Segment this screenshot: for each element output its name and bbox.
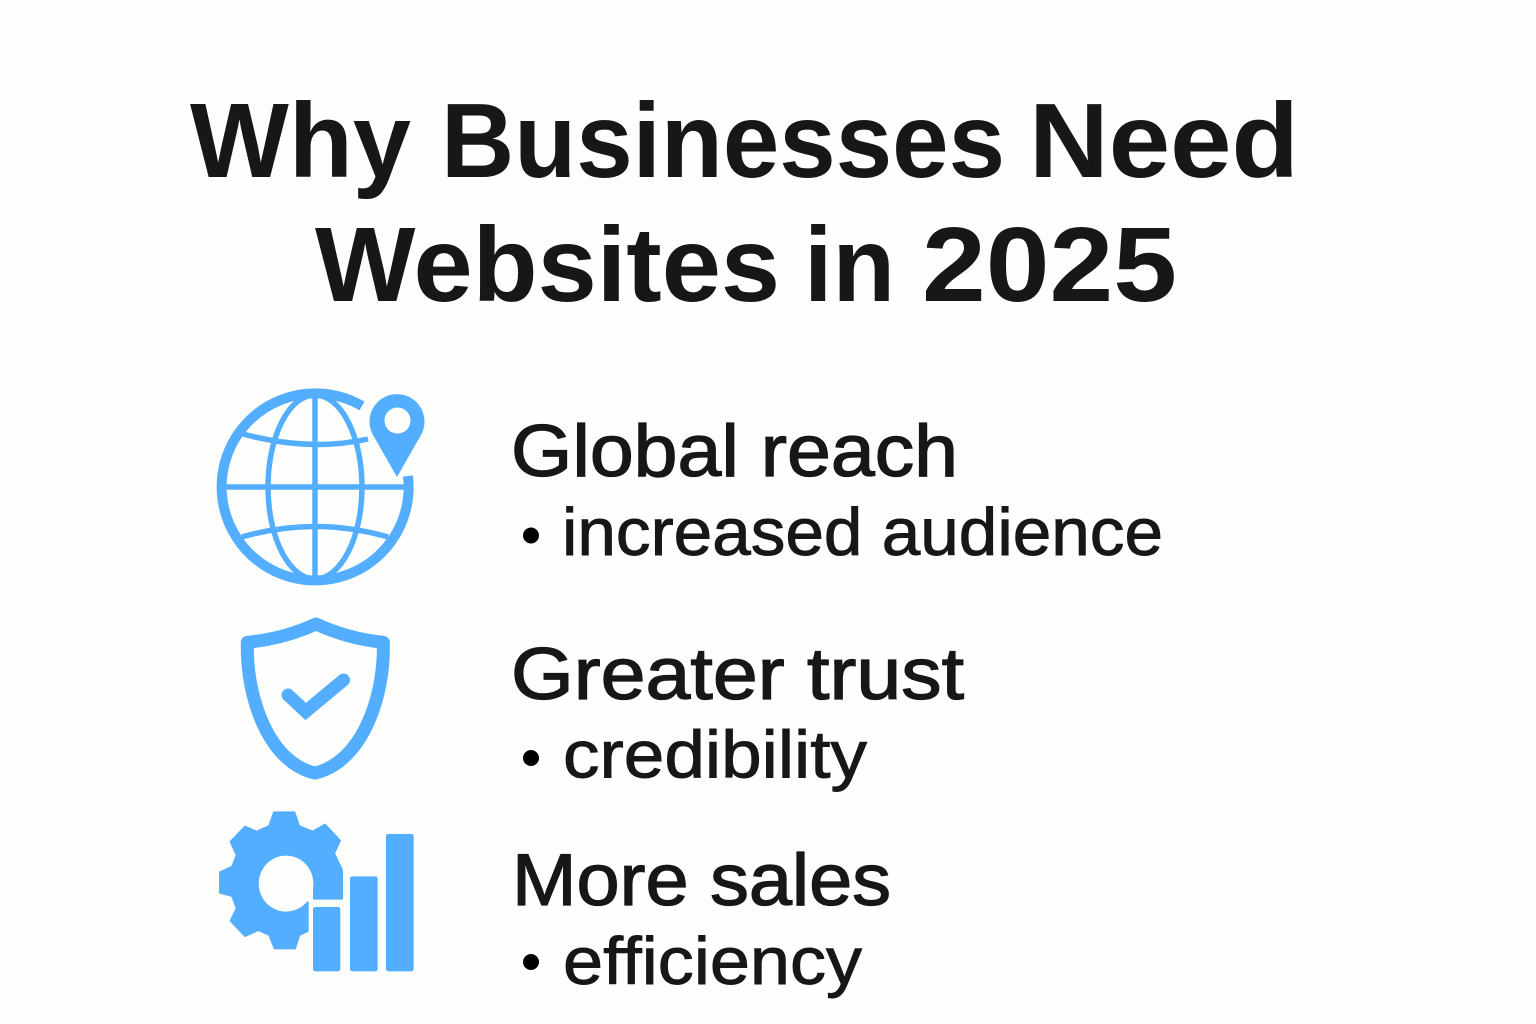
title: Need <box>1029 82 1299 200</box>
panel: global reach <box>222 393 1163 580</box>
heading: global reach: Global reach <box>511 411 958 492</box>
title: Why <box>190 82 411 200</box>
title <box>190 82 1299 324</box>
title: Websites <box>315 206 780 324</box>
title: 2025 <box>922 206 1177 324</box>
bullet: increased audience: increased audience <box>562 495 1163 570</box>
heading: greater trust: Greater trust <box>511 634 964 715</box>
bullet: efficiency: efficiency <box>563 924 863 999</box>
panel: greater trust <box>247 624 964 792</box>
icon: shield with check mark <box>247 624 383 773</box>
panel: more sales <box>220 812 891 999</box>
icon: globe with location pin <box>222 393 424 580</box>
heading: more sales: More sales <box>512 840 891 921</box>
title: in <box>804 206 895 324</box>
title: Businesses <box>441 82 1005 200</box>
bullet: credibility: credibility <box>563 718 868 792</box>
icon: gear with rising bars <box>220 812 413 970</box>
